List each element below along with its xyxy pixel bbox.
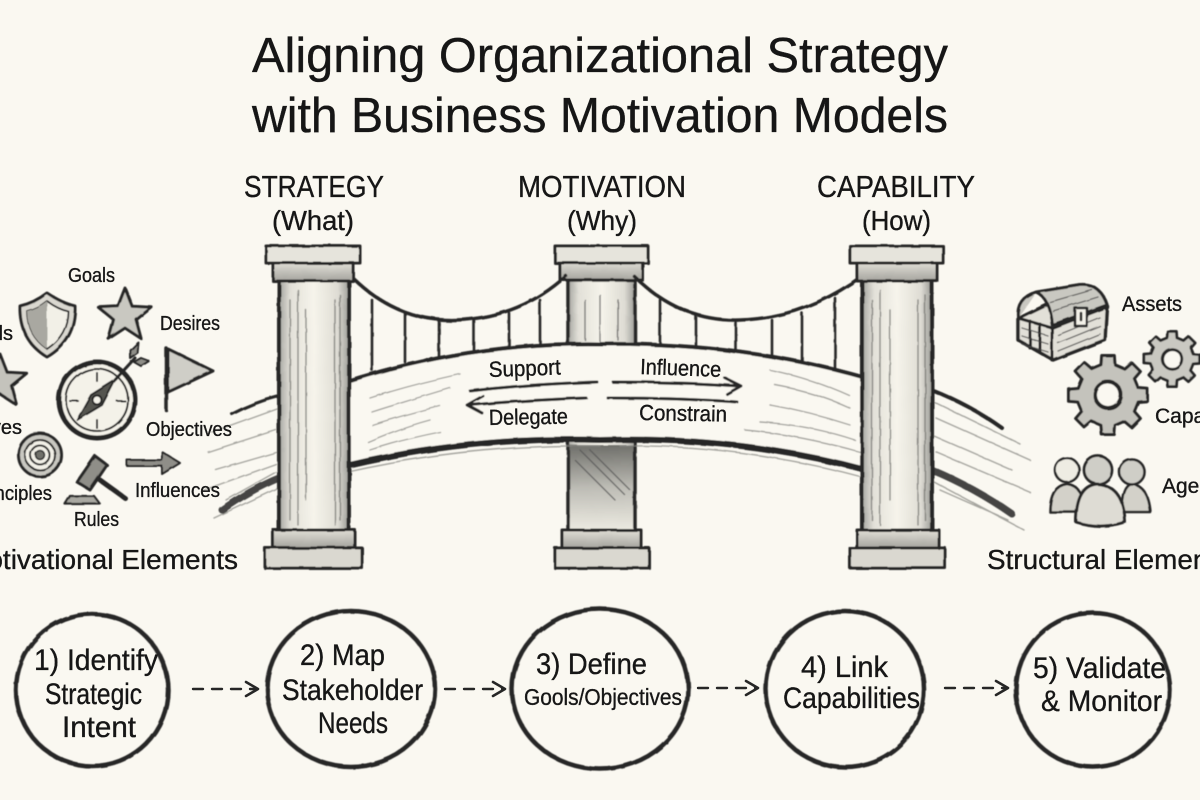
step 4 text: 4) Link: [801, 651, 889, 684]
labels: structural: [987, 293, 1200, 575]
deck labels: Constrain: [639, 400, 727, 427]
step 5 text: & Monitor: [1041, 685, 1162, 718]
pillar: capability: [850, 246, 945, 568]
bridge deck: [345, 344, 866, 478]
deck labels: Influence: [640, 354, 722, 382]
step 2 text: Stakeholder: [282, 674, 423, 707]
pillar: strategy: [265, 246, 362, 568]
step 1 circle: [16, 614, 168, 766]
bridge approach: left: [204, 396, 279, 518]
step 1 text: Strategic: [45, 678, 142, 711]
labels: motivational: Influences: [135, 480, 220, 502]
heading: strategy: (What): [272, 205, 354, 236]
title: Aligning Organizational Strategy: [252, 29, 948, 83]
arrow: step 2 to 3: [445, 682, 505, 696]
step 5 text: [1033, 652, 1166, 718]
pillar: motivation: [555, 246, 649, 568]
panel: motivational elements: [0, 265, 238, 575]
bridge approach: right: [932, 390, 1030, 530]
step 5 text: 5) Validate: [1033, 652, 1166, 685]
labels: motivational: Objectives: [146, 419, 232, 441]
icons: motivational: [0, 288, 213, 504]
deck labels: [488, 354, 727, 430]
step 3 text: 3) Define: [536, 648, 647, 681]
process flow: [16, 609, 1170, 769]
icon: target: [18, 434, 62, 476]
arrow: step 3 to 4: [698, 681, 758, 695]
deck arrows: [467, 378, 741, 413]
heading: capability: [817, 169, 975, 236]
icon: left star: [0, 354, 27, 405]
heading: capability: CAPABILITY: [817, 169, 975, 204]
heading: motivation: (Why): [567, 205, 637, 236]
heading: strategy: STRATEGY: [244, 169, 384, 204]
heading: motivation: [518, 169, 686, 236]
icon: shield: [20, 293, 75, 357]
step 1 text: 1) Identify: [34, 644, 158, 677]
step 1 text: [34, 644, 158, 744]
labels: motivational: Rules: [74, 509, 119, 531]
icon: large gear: [1068, 356, 1148, 434]
heading: capability: (How): [862, 205, 931, 236]
icon: treasure chest: [1018, 285, 1107, 360]
step 3 text: [524, 648, 682, 710]
step 4 circle: [766, 611, 924, 767]
suspension cables and hangers: [349, 274, 862, 372]
labels: structural: Assets: [1122, 293, 1182, 316]
step 4 text: [783, 651, 920, 715]
icon: flag: [166, 348, 213, 410]
heading: strategy: [244, 169, 384, 236]
step 5 circle: [1016, 613, 1170, 767]
step 3 text: Gools/Objectives: [524, 684, 682, 710]
icon: gavel: [65, 456, 125, 504]
labels: motivational: Goals: [68, 265, 115, 287]
title: with Business Motivation Models: [251, 89, 948, 143]
step 3 circle: [512, 609, 688, 769]
deck labels: Support: [488, 354, 561, 382]
step 2 text: [282, 639, 423, 740]
step circles: [16, 609, 1170, 769]
arrow: step 1 to 2: [193, 682, 258, 696]
labels: motivational: [0, 265, 238, 575]
labels: motivational: Desires: [160, 313, 220, 335]
panel: structural elements: [987, 285, 1200, 575]
pillar headings: [244, 169, 975, 236]
icons: structural: [1018, 285, 1200, 526]
icon: compass with arrow: [59, 342, 149, 438]
step 4 text: Capabilities: [783, 682, 920, 715]
step 2 text: Needs: [318, 707, 388, 740]
deck labels: Delegate: [489, 404, 568, 430]
icon: influences arrow: [127, 452, 180, 474]
step 2 circle: [267, 611, 435, 767]
step 1 text: Intent: [62, 711, 137, 744]
icon: star: [98, 288, 152, 339]
arrow: step 4 to 5: [945, 681, 1008, 695]
icon: small gear: [1144, 331, 1200, 387]
bridge illustration: [204, 246, 1030, 568]
title: [251, 29, 948, 143]
step 2 text: 2) Map: [300, 639, 385, 672]
heading: motivation: MOTIVATION: [518, 169, 686, 204]
icon: agents people: [1050, 456, 1150, 526]
